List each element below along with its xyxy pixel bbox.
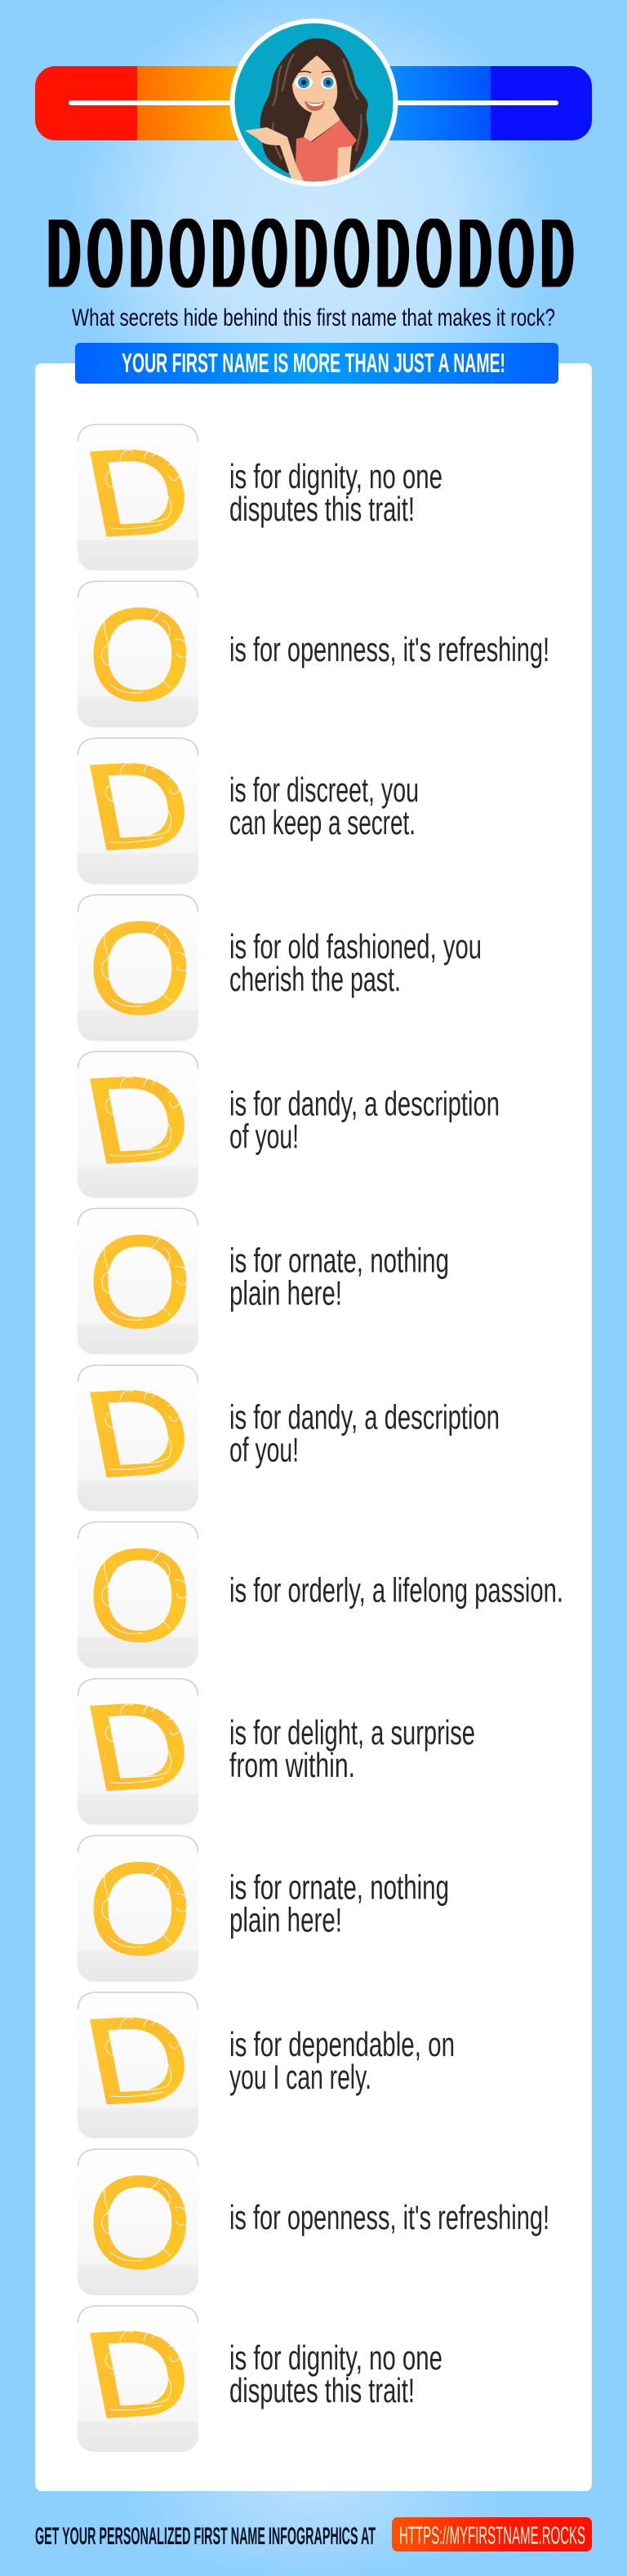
row 1: D dignity <box>75 423 442 571</box>
trait text: of you! <box>229 1117 299 1155</box>
row 5: D dandy <box>75 1050 500 1197</box>
trait text: plain here! <box>229 1273 342 1312</box>
trait text: is for dignity, no one <box>229 2338 442 2377</box>
letter tile D: D <box>75 2304 202 2444</box>
main white panel <box>35 363 592 2491</box>
row 8: O orderly <box>78 1521 563 1668</box>
letter tile O: O <box>88 2150 192 2296</box>
trait text: is for delight, a surprise <box>229 1713 475 1752</box>
row 12: O openness <box>78 2148 549 2296</box>
trait text <box>229 457 442 528</box>
row 10: O ornate <box>78 1835 449 1982</box>
row 3: D discreet <box>75 736 419 884</box>
trait text: plain here! <box>229 1901 342 1939</box>
row 2: O openness <box>78 580 549 728</box>
trait text: is for ornate, nothing <box>229 1868 449 1907</box>
row 13: D dignity <box>75 2304 442 2452</box>
trait text: disputes this trait! <box>229 2371 415 2409</box>
trait text: disputes this trait! <box>229 490 415 528</box>
letter tile O: O <box>88 1523 192 1668</box>
trait text: is for dignity, no one <box>229 457 442 495</box>
hair <box>260 38 368 173</box>
letter tile D: D <box>75 1991 202 2130</box>
trait text <box>229 2025 455 2096</box>
trait text: is for dandy, a description <box>229 1084 500 1122</box>
letter tile O: O <box>88 896 192 1042</box>
row 9: D delight <box>75 1677 475 1825</box>
trait text: is for discreet, you <box>229 771 419 809</box>
letter tile D: D <box>75 736 202 876</box>
face and neck <box>292 56 340 142</box>
letter tile D: D <box>75 1364 202 1503</box>
trait text: is for ornate, nothing <box>229 1241 449 1279</box>
letter tile O: O <box>88 582 192 728</box>
letter tile O: O <box>88 1210 192 1355</box>
trait text: of you! <box>229 1430 299 1469</box>
eyes <box>295 76 313 89</box>
trait text <box>229 1241 449 1312</box>
letter tile D: D <box>75 1050 202 1189</box>
row 7: D dandy <box>75 1364 500 1512</box>
trait text <box>229 1868 449 1939</box>
trait text: from within. <box>229 1746 355 1784</box>
trait text <box>229 1084 500 1155</box>
trait text <box>229 2338 442 2409</box>
letter tile O: O <box>88 1837 192 1982</box>
trait text: is for dependable, on <box>229 2025 455 2063</box>
raised arm and hand <box>245 127 304 181</box>
avatar portrait <box>230 18 398 186</box>
trait text: cherish the past. <box>229 960 401 998</box>
row 6: O ornate <box>78 1207 449 1355</box>
header ribbon bar <box>35 66 592 140</box>
trait text <box>229 1713 475 1784</box>
trait text <box>229 927 482 998</box>
title: DODODODODODOD <box>47 198 581 311</box>
letter tile D: D <box>75 423 202 562</box>
banner <box>75 343 558 384</box>
row 4: O old fashioned <box>78 894 482 1042</box>
trait text <box>229 1397 500 1469</box>
trait text: you I can rely. <box>229 2058 371 2096</box>
trait text: is for dandy, a description <box>229 1397 500 1437</box>
trait text: can keep a secret. <box>229 803 416 842</box>
trait text: is for old fashioned, you <box>229 927 482 966</box>
letter tile D: D <box>75 1677 202 1816</box>
trait text <box>229 771 419 842</box>
smile <box>305 101 325 111</box>
row 11: D dependable <box>75 1991 455 2139</box>
shirt <box>296 120 357 181</box>
